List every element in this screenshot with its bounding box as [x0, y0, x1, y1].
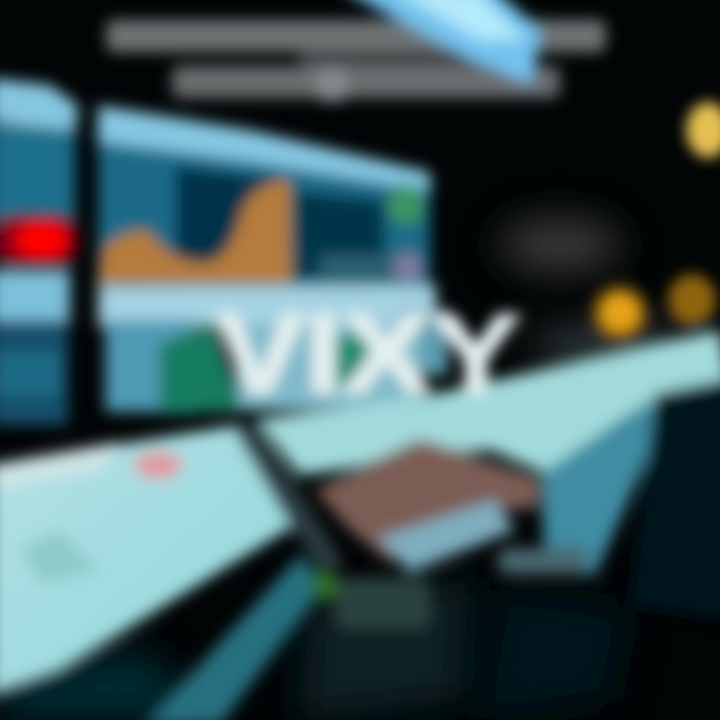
panel: lower monitor	[98, 285, 448, 412]
panel: left monitor	[0, 78, 78, 425]
icon: amber lights	[592, 274, 716, 341]
panel: main monitor	[98, 105, 430, 290]
icon: red indicator	[0, 216, 77, 266]
desk surface	[0, 330, 720, 720]
dark base and strut	[145, 380, 720, 720]
headline: VIXY: VIXY	[216, 291, 520, 416]
lower monitor body	[98, 285, 448, 412]
icon: green status light	[388, 185, 424, 225]
lower dark teal floor	[0, 580, 630, 720]
icon: pink status light	[393, 252, 423, 284]
title text (illegible in the reference)	[106, 20, 606, 102]
green chart block	[160, 322, 367, 412]
left desk panel	[0, 330, 720, 695]
monitor body	[98, 125, 430, 290]
light beam at top	[335, 0, 540, 85]
hand on keyboard	[312, 440, 588, 628]
chart: orange area	[98, 178, 292, 284]
monitor top bar	[98, 105, 430, 192]
icon: yellow lamp	[686, 102, 720, 158]
dashboard silhouette	[500, 219, 690, 361]
